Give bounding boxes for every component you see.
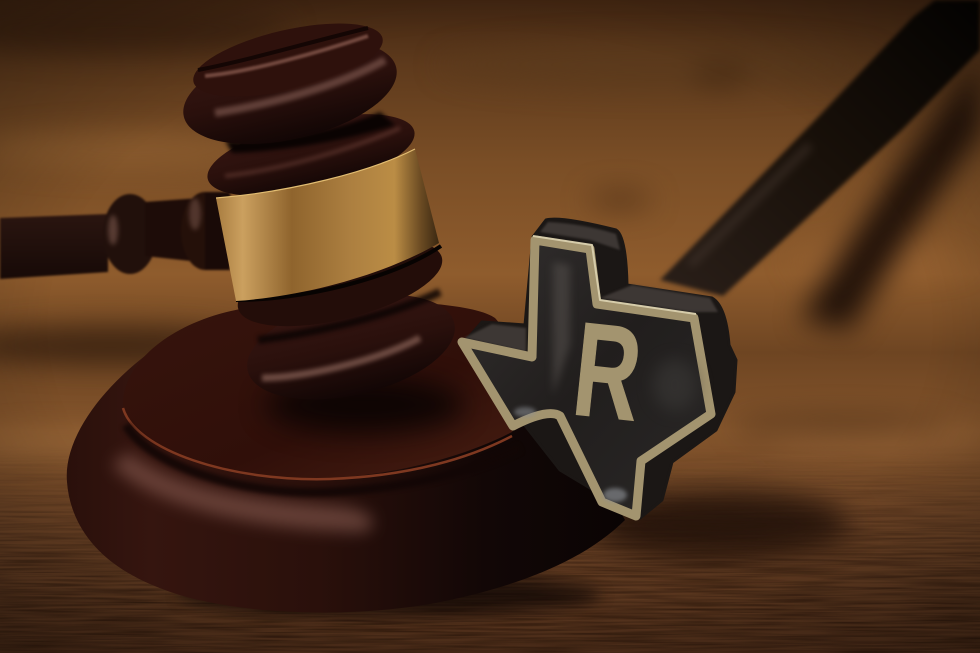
- sound block rim: [123, 408, 512, 479]
- Texas face with brass edge: [462, 240, 711, 516]
- sound block side: [67, 320, 625, 612]
- letter R: R: [567, 294, 648, 450]
- lower gavel cap: [237, 276, 465, 418]
- dark branding iron handle: [660, 0, 980, 296]
- sound block groove: [126, 425, 520, 492]
- lower gavel ring: [229, 223, 451, 343]
- gavel handle left: [0, 192, 230, 279]
- sound block: [67, 301, 625, 612]
- iron block body: [462, 219, 736, 518]
- shadow under sound block: [180, 575, 600, 615]
- gavel contact shadow: [265, 377, 465, 433]
- Texas branding iron head: [462, 219, 736, 518]
- upper gavel ring: [200, 98, 422, 212]
- top gavel cap: [173, 9, 407, 162]
- sound block highlight: [112, 452, 373, 532]
- edge sheen: [533, 236, 696, 314]
- brass band: [216, 149, 439, 301]
- iron top highlight: [464, 222, 718, 352]
- gavel head: [173, 9, 465, 418]
- sound block top: [123, 301, 520, 479]
- face highlights: [514, 262, 697, 502]
